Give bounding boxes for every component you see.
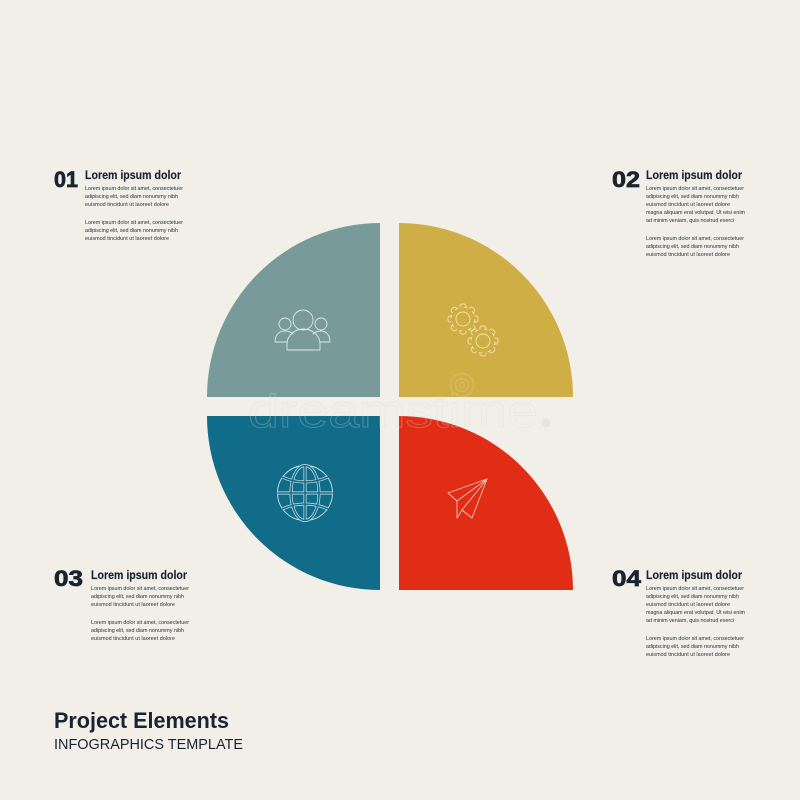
- number 02: 02: [612, 167, 640, 192]
- text block 02: euismod tincidunt ut laoreet dolore: [646, 252, 730, 258]
- text block 04: ad minim veniam, quis nostrud exerci: [646, 618, 734, 624]
- text block 01: euismod tincidunt ut laoreet dolore: [85, 236, 169, 242]
- text block 04: Lorem ipsum dolor sit amet, consectetuer: [646, 586, 744, 592]
- subtitle: INFOGRAPHICS TEMPLATE: [54, 736, 243, 753]
- number 03: 03: [54, 566, 83, 591]
- heading 01: Lorem ipsum dolor: [85, 170, 181, 182]
- icon: lower gear: [468, 326, 498, 356]
- text block 01: Lorem ipsum dolor sit amet, consectetuer: [85, 186, 183, 192]
- icon: paper plane: [448, 479, 487, 518]
- watermark: [248, 374, 550, 437]
- text block 02: ad minim veniam, quis nostrud exerci: [646, 218, 734, 224]
- block 02: [612, 167, 746, 258]
- panel: blue quarter circle: [207, 416, 380, 590]
- text block 01: Lorem ipsum dolor sit amet, consectetuer: [85, 220, 183, 226]
- text block 02: Lorem ipsum dolor sit amet, consectetuer: [646, 186, 744, 192]
- heading 03: Lorem ipsum dolor: [91, 570, 187, 582]
- heading 04: Lorem ipsum dolor: [646, 570, 742, 582]
- icon: globe: [278, 466, 332, 520]
- text block 03: [91, 586, 189, 642]
- panel: gold quarter circle: [399, 223, 573, 397]
- number 04: 04: [612, 566, 642, 591]
- text block 03: Lorem ipsum dolor sit amet, consectetuer: [91, 586, 189, 592]
- text block 02: euismod tincidunt ut laoreet dolore: [646, 202, 730, 208]
- text block 02: [646, 186, 746, 258]
- text block 01: euismod tincidunt ut laoreet dolore: [85, 202, 169, 208]
- text block 04: euismod tincidunt ut laoreet dolore: [646, 652, 730, 658]
- text block 04: [646, 586, 746, 658]
- text block 02: adipiscing elit, sed diam nonummy nibh: [646, 194, 739, 200]
- panel: teal quarter circle: [207, 223, 380, 397]
- text block 03: euismod tincidunt ut laoreet dolore: [91, 636, 175, 642]
- block 04: [612, 566, 746, 658]
- text block 01: [85, 186, 183, 242]
- watermark: dot: [542, 418, 550, 428]
- icon: gears: [448, 304, 498, 356]
- text block 04: Lorem ipsum dolor sit amet, consectetuer: [646, 636, 744, 642]
- text block 02: magna aliquam erat volutpat. Ut wisi enim: [646, 210, 746, 216]
- number 01: 01: [54, 167, 78, 192]
- icon: upper gear: [448, 304, 478, 334]
- text block 01: adipiscing elit, sed diam nonummy nibh: [85, 194, 178, 200]
- text block 03: adipiscing elit, sed diam nonummy nibh: [91, 594, 184, 600]
- text block 02: Lorem ipsum dolor sit amet, consectetuer: [646, 236, 744, 242]
- watermark: wordmark: dreamstime: [248, 385, 538, 437]
- block 03: [54, 566, 189, 642]
- title: Project Elements: [54, 708, 229, 733]
- block 01: [54, 167, 183, 242]
- text block 01: adipiscing elit, sed diam nonummy nibh: [85, 228, 178, 234]
- text block 03: adipiscing elit, sed diam nonummy nibh: [91, 628, 184, 634]
- icon: people: [275, 310, 330, 350]
- text block 03: Lorem ipsum dolor sit amet, consectetuer: [91, 620, 189, 626]
- text block 04: adipiscing elit, sed diam nonummy nibh: [646, 644, 739, 650]
- text block 02: adipiscing elit, sed diam nonummy nibh: [646, 244, 739, 250]
- watermark: spiral: [450, 374, 474, 396]
- heading 02: Lorem ipsum dolor: [646, 170, 742, 182]
- text block 04: magna aliquam erat volutpat. Ut wisi enim: [646, 610, 746, 616]
- text block 03: euismod tincidunt ut laoreet dolore: [91, 602, 175, 608]
- text block 04: euismod tincidunt ut laoreet dolore: [646, 602, 730, 608]
- panel: red quarter circle: [399, 416, 573, 590]
- text block 04: adipiscing elit, sed diam nonummy nibh: [646, 594, 739, 600]
